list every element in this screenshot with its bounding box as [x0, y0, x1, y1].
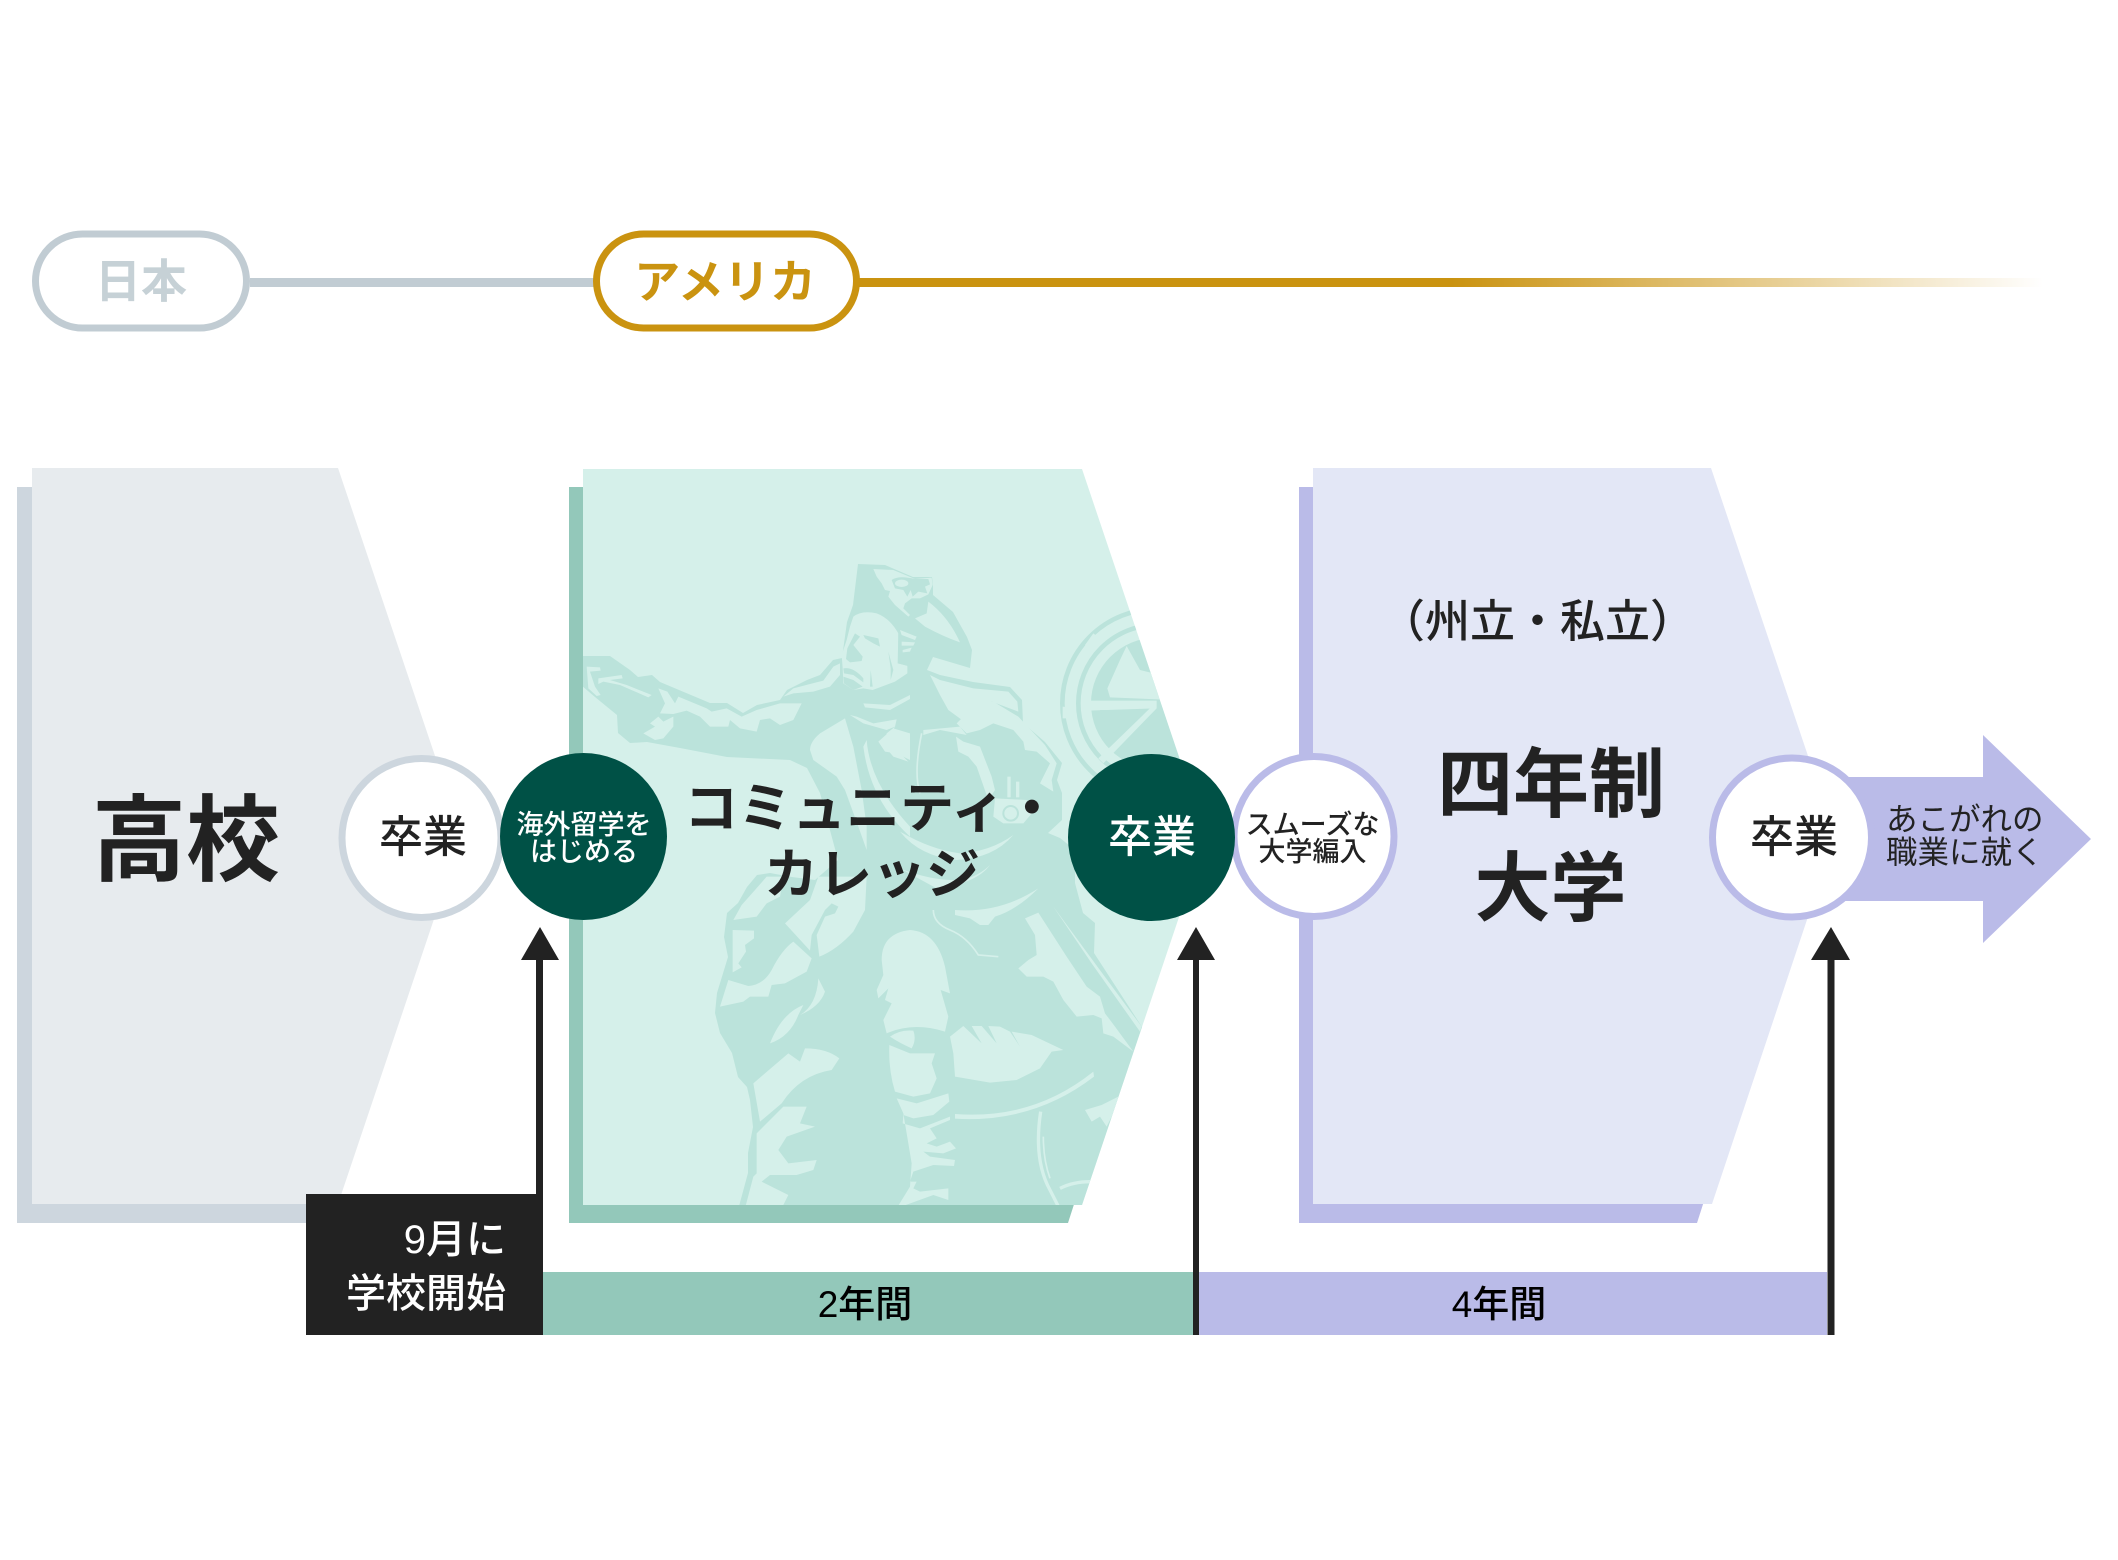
circle: smooth transfer — [1234, 756, 1394, 916]
timeline: America — [596, 234, 2044, 328]
circle: high school graduation — [342, 758, 501, 918]
callout: school starts in September: 9月に — [404, 1218, 506, 1262]
subheading: state and private: （州立・私立） — [1380, 596, 1695, 647]
saddle and leg cutouts — [720, 877, 956, 1208]
callout: school starts in September — [306, 1194, 543, 1335]
text: dream job: あこがれの — [1886, 801, 2044, 837]
wheel medallion — [1060, 610, 1180, 777]
panel: four-year university — [1299, 468, 1835, 1223]
panel: community college — [569, 469, 1206, 1223]
circle: smooth transfer: スムーズな — [1246, 810, 1379, 840]
arrow: career outcome — [1800, 735, 2091, 943]
heading: community college: コミュニティ・ — [684, 779, 1059, 839]
callout: school starts in September: 学校開始 — [346, 1272, 506, 1316]
text: dream job: 職業に就く — [1886, 834, 2044, 870]
bar: two years — [543, 1272, 1193, 1335]
circle: smooth transfer: 大学編入 — [1258, 837, 1366, 867]
circle: university graduation: 卒業 — [1750, 813, 1838, 862]
circle: college graduation — [1068, 754, 1235, 921]
panel: high school — [17, 468, 462, 1223]
heading: community college: カレッジ — [764, 845, 980, 905]
heading: four-year university: 大学 — [1474, 847, 1626, 932]
circle: begin study abroad — [500, 753, 667, 920]
circle: college graduation: 卒業 — [1108, 813, 1196, 862]
coat cutouts — [885, 675, 1057, 888]
timeline: Japan — [36, 234, 595, 328]
circle: begin study abroad: はじめる — [530, 837, 638, 867]
heading: four-year university: 四年制 — [1437, 743, 1665, 828]
bar: two years: 2年間 — [818, 1284, 912, 1325]
arrow: end of two years — [1177, 927, 1215, 1335]
arrow: end of four years — [1811, 927, 1850, 1335]
arm and upper-body cutouts — [587, 663, 910, 850]
bar: four years: 4年間 — [1452, 1284, 1546, 1325]
label pill: 日本 — [36, 234, 246, 328]
figure silhouette — [583, 564, 1142, 1205]
circle: high school graduation: 卒業 — [379, 813, 467, 862]
circle: university graduation — [1712, 758, 1872, 917]
label pill: 日本: 日本 — [95, 256, 187, 308]
label pill: アメリカ — [596, 234, 856, 328]
circle: begin study abroad: 海外留学を — [516, 810, 652, 840]
medal ring details — [917, 733, 1018, 821]
bar: four years — [1199, 1272, 1827, 1335]
horse cutouts — [933, 888, 1142, 1208]
arrow: start of school — [521, 927, 559, 1195]
illustration: statue watermark — [583, 564, 1180, 1205]
head and hat — [842, 569, 960, 690]
label pill: アメリカ: アメリカ — [634, 256, 816, 308]
heading: high school: 高校 — [92, 788, 280, 893]
